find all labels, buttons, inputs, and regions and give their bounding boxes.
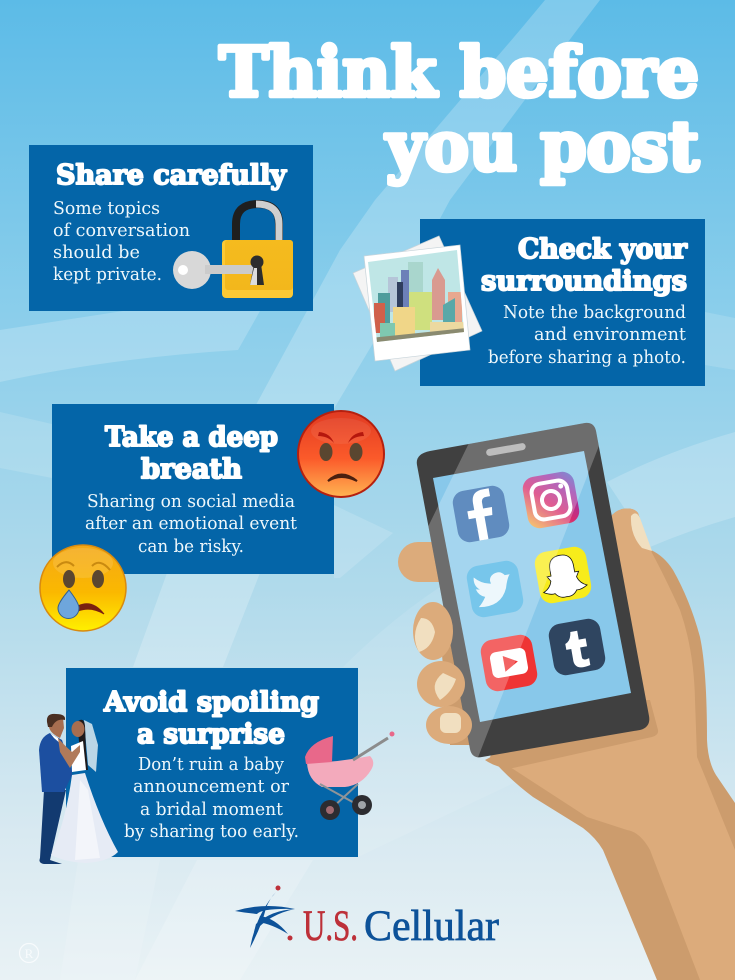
heading: take a deep breath bbox=[105, 422, 278, 485]
text: take a deep breath body: after an emotional event bbox=[85, 513, 298, 534]
phone bbox=[417, 418, 649, 760]
icon: instagram bbox=[521, 470, 581, 530]
panel: take a deep breath bbox=[40, 404, 384, 631]
text: share carefully body: of conversation bbox=[53, 220, 190, 241]
screen glare bbox=[425, 418, 602, 760]
text: check your surroundings body: before sharing a photo. bbox=[488, 347, 686, 368]
icon: wedding couple bbox=[39, 714, 118, 864]
panel: share carefully bbox=[29, 145, 313, 311]
heading: check your surroundings: surroundings bbox=[481, 266, 687, 297]
icon: angry face bbox=[298, 411, 384, 497]
text: share carefully body bbox=[53, 198, 190, 285]
heading: check your surroundings: Check your bbox=[518, 234, 688, 265]
icon: youtube bbox=[479, 633, 539, 693]
heading: check your surroundings bbox=[481, 234, 688, 297]
text: avoid spoiling body: a bridal moment bbox=[140, 799, 284, 820]
registered mark: R bbox=[25, 946, 34, 961]
text: take a deep breath body: Sharing on social media bbox=[87, 491, 295, 512]
text: avoid spoiling body bbox=[124, 754, 299, 842]
text: share carefully body: Some topics bbox=[53, 198, 160, 219]
icon: snapchat bbox=[533, 545, 593, 605]
logo: U.S. Cellular bbox=[235, 886, 499, 950]
panel: avoid spoiling a surprise bbox=[39, 668, 394, 864]
title: you post bbox=[385, 107, 700, 187]
icon: facebook bbox=[451, 484, 511, 544]
heading: avoid spoiling a surprise bbox=[103, 687, 319, 750]
illustration: hand holding phone bbox=[398, 418, 735, 980]
text: share carefully body: should be bbox=[53, 242, 140, 263]
icon: tumblr bbox=[547, 617, 607, 677]
speaker bbox=[486, 443, 526, 456]
icon: crying face bbox=[40, 545, 126, 631]
text: check your surroundings body: and environment bbox=[534, 324, 687, 345]
icon: twitter bbox=[465, 559, 525, 619]
icon: padlock and key bbox=[173, 204, 293, 298]
heading: avoid spoiling a surprise: Avoid spoiling bbox=[103, 687, 319, 718]
heading: avoid spoiling a surprise: a surprise bbox=[137, 719, 285, 750]
text: check your surroundings body bbox=[488, 302, 687, 368]
logo star bbox=[235, 886, 295, 948]
registered mark bbox=[20, 944, 38, 962]
heading: take a deep breath: breath bbox=[141, 454, 242, 485]
title: Think before bbox=[219, 33, 699, 113]
logo: U.S. Cellular: U.S. bbox=[303, 903, 358, 950]
text: take a deep breath body bbox=[85, 491, 298, 557]
text: avoid spoiling body: by sharing too early. bbox=[124, 821, 299, 842]
text: check your surroundings body: Note the background bbox=[503, 302, 686, 323]
panel: check your surroundings bbox=[353, 219, 705, 386]
text: share carefully body: kept private. bbox=[53, 264, 162, 285]
hand and arm bbox=[398, 508, 735, 980]
logo: U.S. Cellular: Cellular bbox=[364, 903, 499, 950]
heading: share carefully: Share carefully bbox=[56, 160, 287, 191]
text: avoid spoiling body: Don’t ruin a baby bbox=[138, 754, 285, 775]
text: take a deep breath body: can be risky. bbox=[138, 536, 244, 557]
text: avoid spoiling body: announcement or bbox=[133, 776, 289, 797]
title bbox=[219, 33, 700, 187]
icon: city photos bbox=[353, 236, 482, 371]
fingers bbox=[413, 602, 472, 744]
icon: baby stroller bbox=[305, 732, 394, 820]
heading: take a deep breath: Take a deep bbox=[105, 422, 278, 453]
